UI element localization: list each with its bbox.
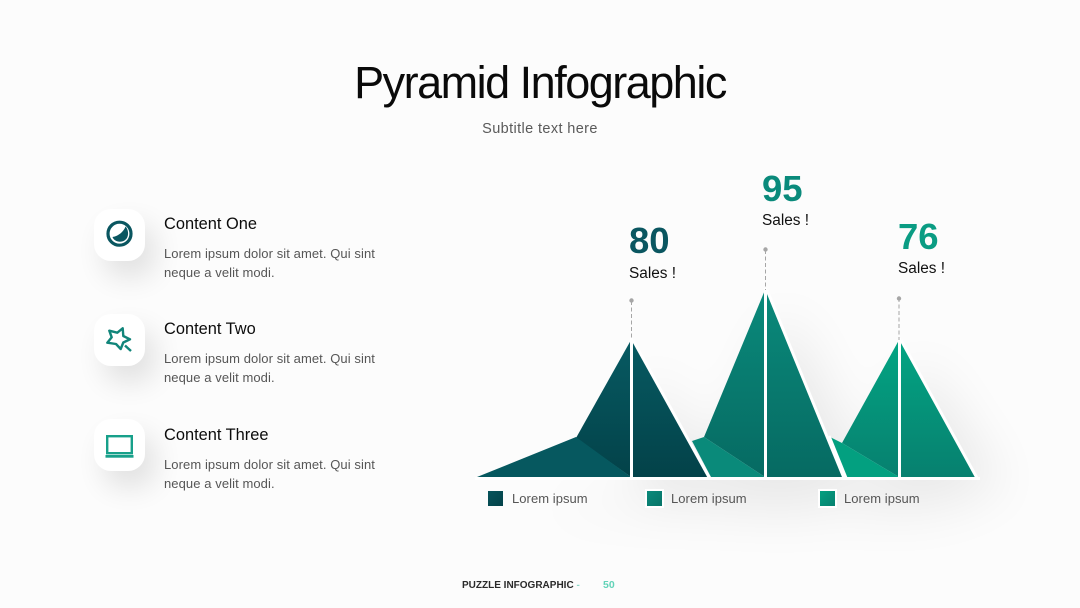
number: 76 (898, 216, 939, 257)
value: 95 (762, 168, 809, 229)
label: Sales ! (762, 212, 809, 229)
legend (488, 489, 920, 508)
heading: Content One (164, 215, 257, 233)
subtitle: Subtitle text here (482, 121, 598, 137)
panel: content two (100, 320, 375, 387)
heading: Content Two (164, 320, 256, 338)
shadows (560, 310, 1005, 520)
icon: moon in circle (94, 209, 145, 261)
legend label 1: Lorem ipsum (512, 491, 588, 506)
panel: content three (100, 426, 375, 492)
pyramid: 95 (692, 290, 844, 478)
text block: Lorem ipsum dolor sit amet. Qui sint neque a velit modi. (164, 246, 375, 280)
legend swatch 3 (820, 491, 835, 506)
value: 80 (629, 220, 676, 282)
leader dots (629, 247, 901, 303)
baseline and centre lines (475, 288, 980, 478)
text block: Lorem ipsum dolor sit amet. Qui sint neque a velit modi. (164, 351, 375, 385)
pyramid: 76 (829, 340, 977, 478)
label: Sales ! (898, 260, 945, 277)
legend swatch 1 (488, 491, 503, 506)
leader lines (632, 250, 899, 340)
icon: star wand (94, 314, 145, 366)
icon: laptop (94, 419, 145, 471)
title: Pyramid Infographic (354, 57, 726, 108)
text block: Lorem ipsum dolor sit amet. Qui sint neque a velit modi. (164, 457, 375, 491)
label: Sales ! (629, 265, 676, 282)
page number: 50 (603, 579, 615, 591)
legend label 2: Lorem ipsum (671, 491, 747, 506)
legend label 3: Lorem ipsum (844, 491, 920, 506)
legend swatch 2 (647, 491, 662, 506)
number: 95 (762, 168, 803, 209)
value: 76 (898, 216, 945, 277)
footer label: PUZZLE INFOGRAPHIC - (462, 580, 580, 591)
panel: content one (100, 215, 375, 282)
heading: Content Three (164, 426, 268, 444)
footer (462, 579, 615, 591)
number: 80 (629, 220, 670, 261)
pyramid: 80 (477, 340, 710, 479)
